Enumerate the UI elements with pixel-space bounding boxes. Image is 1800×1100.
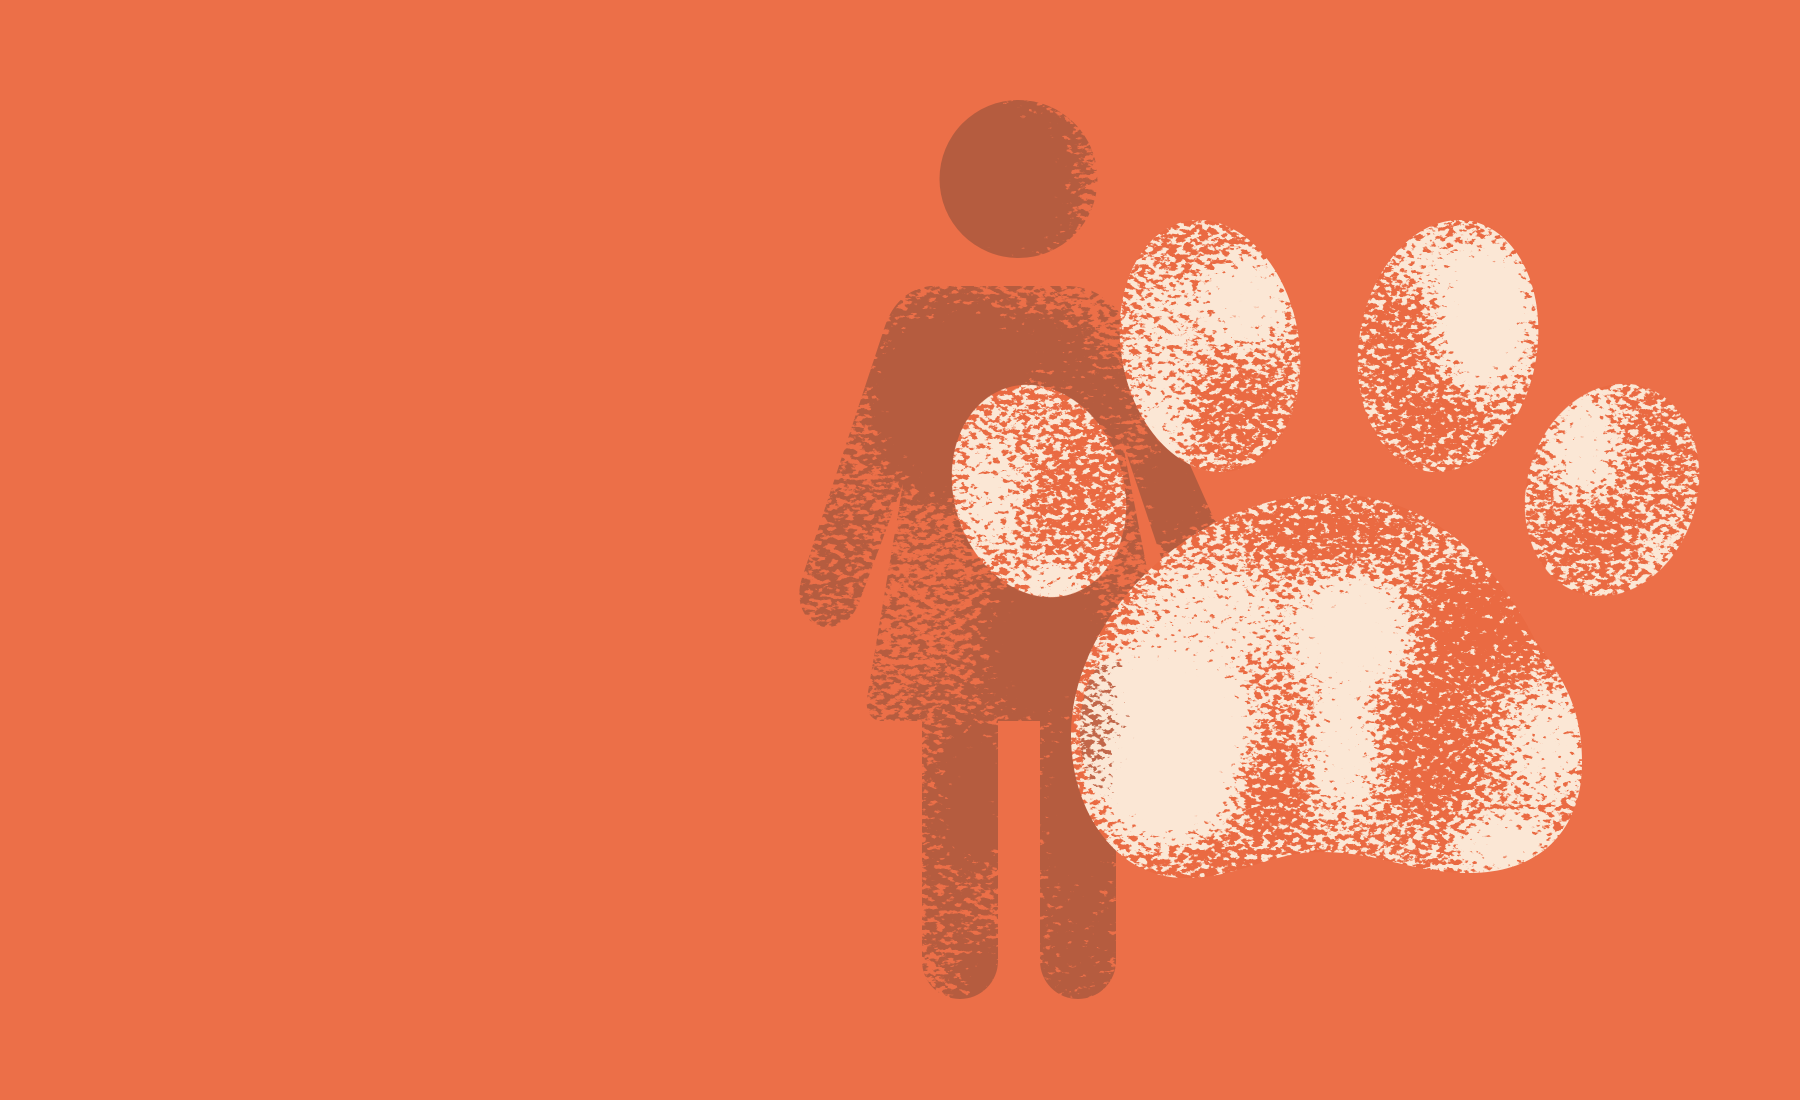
paw toe four bbox=[952, 384, 1126, 598]
paw toe one bbox=[1120, 220, 1300, 472]
woman body and dress bbox=[799, 286, 1240, 721]
paw main pad bbox=[1071, 494, 1582, 878]
paw toe three bbox=[1524, 384, 1700, 596]
paw toe two bbox=[1358, 220, 1538, 472]
woman head bbox=[940, 100, 1098, 258]
paw cream print bbox=[926, 205, 1725, 878]
woman right leg bbox=[1040, 721, 1116, 999]
illustration: woman figure and paw print bbox=[799, 100, 1700, 999]
woman left leg bbox=[922, 721, 998, 999]
icon: woman figure bbox=[799, 100, 1240, 999]
paw shading over the figure bbox=[1080, 660, 1144, 800]
paw base knock-out bbox=[926, 205, 1725, 878]
icon: paw print bbox=[926, 205, 1725, 878]
